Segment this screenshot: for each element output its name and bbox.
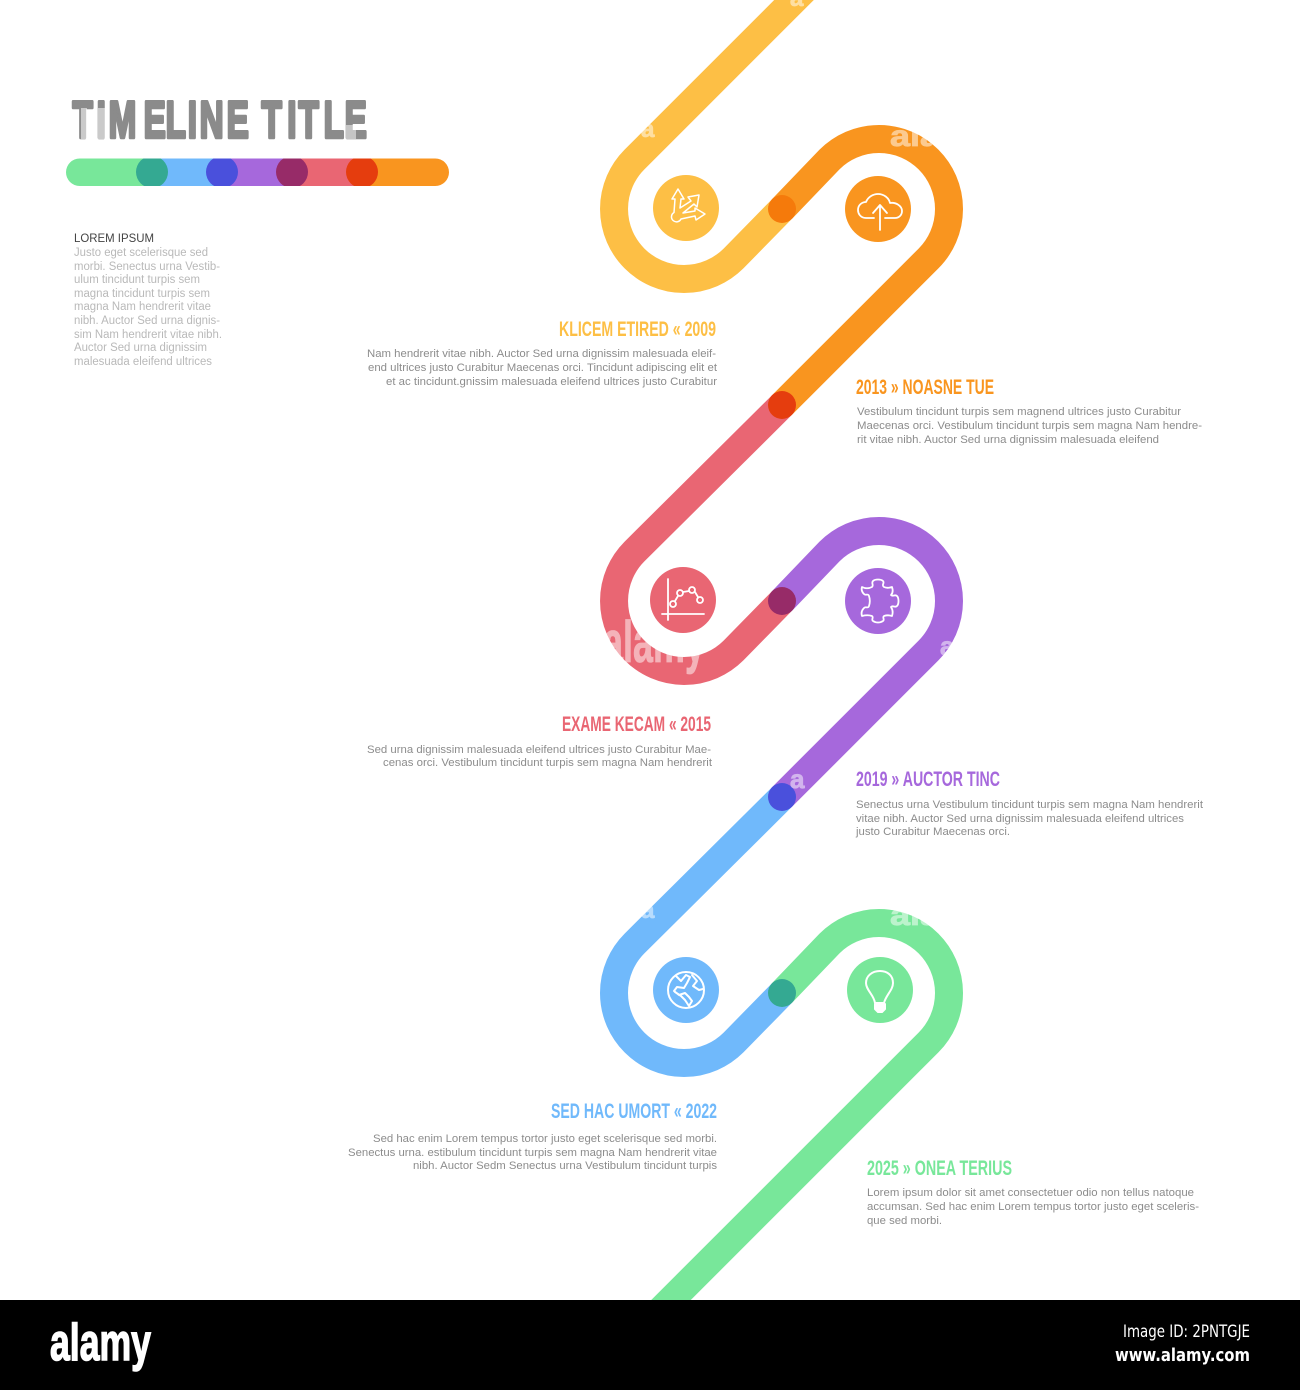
heading: 2013 » NOASNE TUE — [856, 376, 994, 399]
icon: cloud upload on orange circle — [845, 176, 911, 242]
segment: yellow — [614, 0, 804, 279]
icon: globe on blue circle — [653, 957, 719, 1023]
watermark fragments: a — [790, 764, 805, 794]
intro text block: ulum tincidunt turpis sem — [74, 274, 200, 286]
watermark fragments: a — [641, 897, 655, 924]
milestone: 2009 — [367, 318, 718, 388]
description: Maecenas orci. Vestibulum tincidunt turpis sem magna Nam hendre- — [857, 420, 1202, 432]
description: Nam hendrerit vitae nibh. Auctor Sed urna dignissim malesuada eleif- — [367, 348, 716, 360]
watermark fragments: a — [940, 631, 955, 661]
description — [367, 744, 713, 769]
intro text block: magna tincidunt turpis sem — [74, 288, 210, 300]
description: Lorem ipsum dolor sit amet consectetuer odio non tellus natoque — [867, 1187, 1194, 1199]
description — [348, 1133, 717, 1172]
description — [857, 406, 1202, 446]
image id: Image ID: 2PNTGJE — [1123, 1322, 1250, 1342]
segment: purple — [782, 531, 949, 797]
intro text block: nibh. Auctor Sed urna dignis- — [74, 315, 220, 327]
milestone: 2025 — [867, 1157, 1199, 1227]
milestone: 2019 — [855, 768, 1204, 838]
watermark fragments: a — [641, 116, 655, 143]
description: et ac tincidunt.gnissim malesuada eleifend ultrices justo Curabitur — [386, 376, 717, 388]
description — [855, 799, 1204, 838]
description: justo Curabitur Maecenas orci. — [855, 826, 1010, 838]
description: nibh. Auctor Sedm Senectus urna Vestibulum tincidunt turpis — [413, 1160, 717, 1172]
footer band — [0, 1300, 1300, 1390]
heading: 2025 » ONEA TERIUS — [867, 1157, 1012, 1180]
icon: light bulb on green circle — [847, 957, 913, 1023]
icon: arrows on yellow circle — [653, 175, 719, 241]
intro text block: malesuada eleifend ultrices — [74, 356, 212, 368]
watermark fragments: alamy — [603, 610, 705, 675]
description: Senectus urna. estibulum tincidunt turpis sem magna Nam hendrerit vitae — [348, 1147, 717, 1159]
description: Vestibulum tincidunt turpis sem magnend ultrices justo Curabitur — [857, 406, 1181, 418]
description: Senectus urna Vestibulum tincidunt turpis sem magna Nam hendrerit — [856, 799, 1204, 811]
description: vitae nibh. Auctor Sed urna dignissim malesuada eleifend ultrices — [856, 813, 1184, 825]
description: Sed urna dignissim malesuada eleifend ultrices justo Curabitur Mae- — [367, 744, 711, 756]
footer url: www.alamy.com — [1115, 1345, 1250, 1366]
intro text block: Justo eget scelerisque sed — [74, 247, 208, 259]
intro text block: LOREM IPSUM — [74, 233, 154, 245]
watermark fragments: ala — [890, 120, 940, 153]
description — [367, 348, 718, 388]
icon: puzzle piece on purple circle — [845, 568, 911, 634]
intro text block: Auctor Sed urna dignissim — [74, 342, 207, 354]
description: end ultrices justo Curabitur Maecenas orci. Tincidunt adipiscing elit et — [368, 362, 718, 374]
footer logo: alamy — [50, 1314, 151, 1372]
segment: blue — [614, 797, 782, 1063]
description — [867, 1187, 1199, 1227]
description: que sed morbi. — [867, 1215, 942, 1227]
description: Sed hac enim Lorem tempus tortor justo eget scelerisque sed morbi. — [373, 1133, 717, 1145]
intro text block: morbi. Senectus urna Vestib- — [74, 261, 220, 273]
heading: EXAME KECAM « 2015 — [562, 713, 711, 736]
timeline path — [614, 0, 949, 1311]
milestone: 2022 — [348, 1100, 717, 1172]
segment: red — [614, 405, 782, 671]
title: TIMELINE TITLE — [73, 91, 367, 149]
milestone: 2013 — [856, 376, 1202, 446]
heading: SED HAC UMORT « 2022 — [551, 1100, 717, 1123]
segment: green — [660, 923, 949, 1311]
intro text block: magna Nam hendrerit vitae — [74, 301, 211, 313]
intro text block: sim Nam hendrerit vitae nibh. — [74, 329, 222, 341]
timeline junction dots — [768, 195, 796, 1007]
legend colour bar — [66, 158, 449, 186]
description: rit vitae nibh. Auctor Sed urna dignissim malesuada eleifend — [857, 434, 1159, 446]
description: accumsan. Sed hac enim Lorem tempus tortor justo eget sceleris- — [867, 1201, 1199, 1213]
intro text block — [74, 233, 222, 368]
watermark fragments — [603, 0, 955, 932]
heading: KLICEM ETIRED « 2009 — [559, 318, 716, 341]
segment: orange — [782, 139, 949, 405]
heading: 2019 » AUCTOR TINC — [856, 768, 1000, 791]
description: cenas orci. Vestibulum tincidunt turpis sem magna Nam hendrerit — [383, 757, 713, 769]
icon: line chart on red circle — [650, 567, 716, 633]
milestone: 2015 — [367, 713, 713, 769]
watermark fragments: ala — [890, 899, 940, 932]
